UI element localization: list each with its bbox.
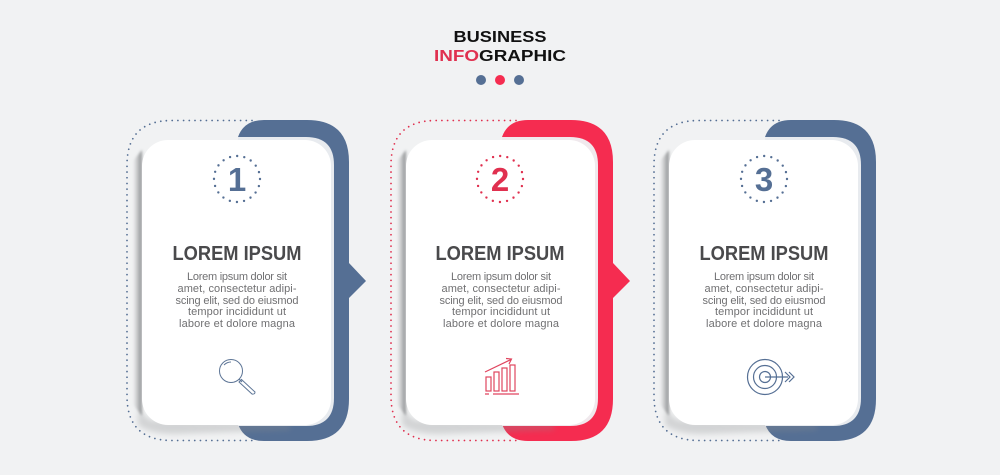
card shadow 2 xyxy=(397,150,554,434)
ribbon with arrow 2 xyxy=(502,120,630,441)
title dots xyxy=(476,75,524,85)
ribbon 3 xyxy=(765,120,876,441)
body text 1: scing elit, sed do eiusmod xyxy=(176,295,298,307)
heading 3: LOREM IPSUM xyxy=(700,243,828,265)
dotted outline 2 xyxy=(391,120,516,440)
number badge 3: 3 xyxy=(755,161,773,198)
panel: step 2 xyxy=(391,120,630,441)
body text 1 xyxy=(176,271,298,330)
number badge 2: 2 xyxy=(491,161,509,198)
body text 1: Lorem ipsum dolor sit xyxy=(187,271,287,283)
body text 3 xyxy=(702,271,826,330)
body text 3: amet, consectetur adipi- xyxy=(704,283,824,295)
body text 1: amet, consectetur adipi- xyxy=(178,283,297,295)
body text 1: labore et dolore magna xyxy=(179,318,296,330)
icon: bar chart with arrow xyxy=(485,358,519,394)
card 1 xyxy=(142,140,331,425)
heading 1: LOREM IPSUM xyxy=(172,243,302,265)
dotted outline 1 xyxy=(127,120,252,440)
card shadow 1 xyxy=(133,150,290,434)
body text 2: amet, consectetur adipi- xyxy=(442,283,561,295)
title: INFO GRAPHIC xyxy=(434,48,566,65)
card halo 3 xyxy=(765,137,861,426)
body text 3: Lorem ipsum dolor sit xyxy=(714,271,814,283)
panel: step 1 xyxy=(127,120,366,441)
card 3 xyxy=(669,140,858,425)
body text 2 xyxy=(440,271,562,330)
body text 3: tempor incididunt ut xyxy=(715,306,813,318)
ribbon with arrow 1 xyxy=(238,120,366,441)
body text 2: Lorem ipsum dolor sit xyxy=(451,271,551,283)
card 2 xyxy=(406,140,595,425)
number badge 1 xyxy=(214,156,260,202)
number badge 1: 1 xyxy=(228,161,246,198)
body text 3: labore et dolore magna xyxy=(706,318,823,330)
card halo 1 xyxy=(238,137,334,426)
card halo 2 xyxy=(502,137,598,426)
heading 2: LOREM IPSUM xyxy=(436,243,564,265)
title xyxy=(434,29,566,65)
panel: step 3 xyxy=(654,120,876,441)
icon: target with arrow xyxy=(748,360,794,394)
number badge 3 xyxy=(741,156,787,202)
icon: magnifier xyxy=(220,360,255,394)
number badge 2 xyxy=(477,156,523,202)
title: BUSINESS xyxy=(454,29,546,46)
body text 2: labore et dolore magna xyxy=(443,318,560,330)
body text 2: tempor incididunt ut xyxy=(452,306,550,318)
dotted outline 3 xyxy=(654,120,779,440)
card shadow 3 xyxy=(660,150,817,434)
body text 3: scing elit, sed do eiusmod xyxy=(702,295,826,307)
body text 2: scing elit, sed do eiusmod xyxy=(440,295,562,307)
body text 1: tempor incididunt ut xyxy=(188,306,286,318)
